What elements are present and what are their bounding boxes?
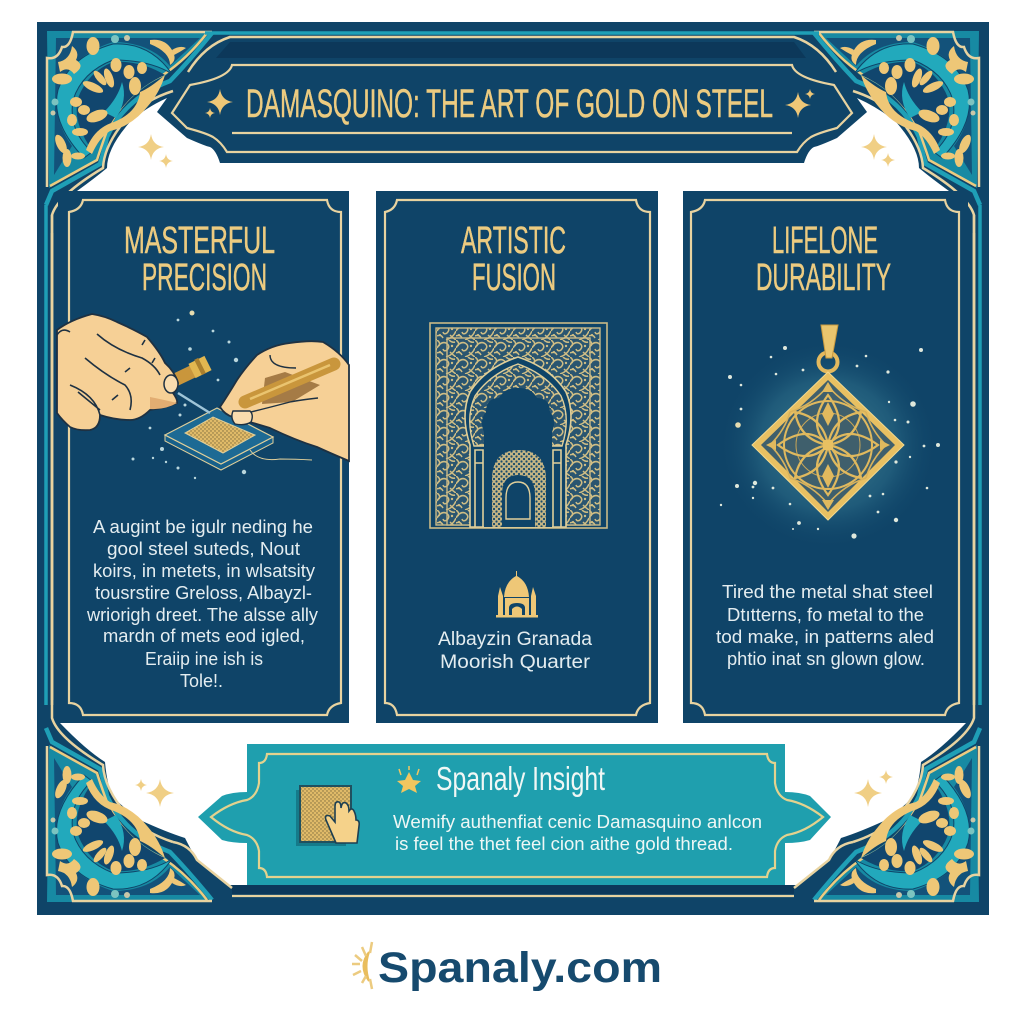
icon: gold tile with hand [296,786,359,846]
heading: durability: DURABILITY [756,257,891,299]
right hand [220,341,349,461]
heading: artistic fusion [461,220,566,299]
body text: Tole!. [180,670,223,691]
stylus [245,364,334,402]
panel: artistic fusion [376,191,658,723]
icon: sun [352,942,372,989]
insight body: is feel the thet feel cion aithe gold thread. [395,833,733,854]
location caption: Moorish Quarter [440,652,591,673]
heading: masterful precision [124,220,275,299]
heading: durability [756,220,891,299]
frame side lines [46,205,980,705]
body text: koirs, in metets, in wlsatsity [93,560,316,581]
heading: artistic fusion: FUSION [472,257,556,299]
title sparkles left [205,89,233,118]
body text: tousrstire Greloss, Albayzl- [95,582,312,603]
corner ornament: bottom right [814,233,980,902]
body text: tod make, in patterns aled [716,626,934,647]
teal leaf [104,82,124,118]
teal crescent [56,44,172,158]
icon: star [397,766,421,793]
title banner [172,33,852,152]
insight heading: Spanaly Insight [436,760,605,797]
heading: artistic fusion: ARTISTIC [461,220,566,262]
chisel [150,363,210,413]
body text: phtio inat sn glown glow. [727,648,925,669]
body text: Tired the metal shat steel [722,581,933,602]
outer navy ground [54,38,200,175]
insight body [393,811,762,854]
heading: masterful precision: MASTERFUL [124,220,275,262]
body text: Dtıtterns, fo metal to the [727,604,924,625]
corner ornament: bottom left [46,233,212,902]
illustration: hands engraving gold [57,310,349,479]
callout: spanaly insight [198,744,831,885]
location caption: Albayzin Granada [438,629,592,650]
location caption [438,629,592,673]
heading: masterful precision: PRECISION [142,257,267,299]
navy inner ground [77,62,165,150]
panel: lifelong durability [683,191,968,723]
white interior field [60,98,966,885]
sparkles on white [135,134,895,807]
panel: masterful precision [57,191,349,723]
insight body: Wemify authenfiat cenic Damasquino anlcon [393,811,762,832]
title sparkles right [785,89,815,118]
body text: Eraiip ine ish is [145,648,263,669]
wordmark: Spanaly.com [378,944,662,992]
corner ornament: top right [814,31,980,700]
icon: mosque [496,571,538,618]
bottom frame band [173,842,853,896]
engraved steel tile [165,408,312,470]
body text: gool steel suteds, Nout [107,538,300,559]
logo: spanaly.com [352,942,662,992]
gold swoosh [86,75,165,154]
body text [86,516,319,691]
corner ornament: top left [46,31,212,700]
left hand [57,314,178,430]
illustration: moorish arch [430,323,607,528]
illustration: gold pendant [718,325,940,550]
heading: durability: LIFELONE [772,220,878,262]
body text: A augint be igulr neding he [93,516,313,537]
body text [716,581,934,669]
body text: wriorigh dreet. The alsse ally [86,604,319,625]
body text: mardn of mets eod igled, [103,625,305,646]
